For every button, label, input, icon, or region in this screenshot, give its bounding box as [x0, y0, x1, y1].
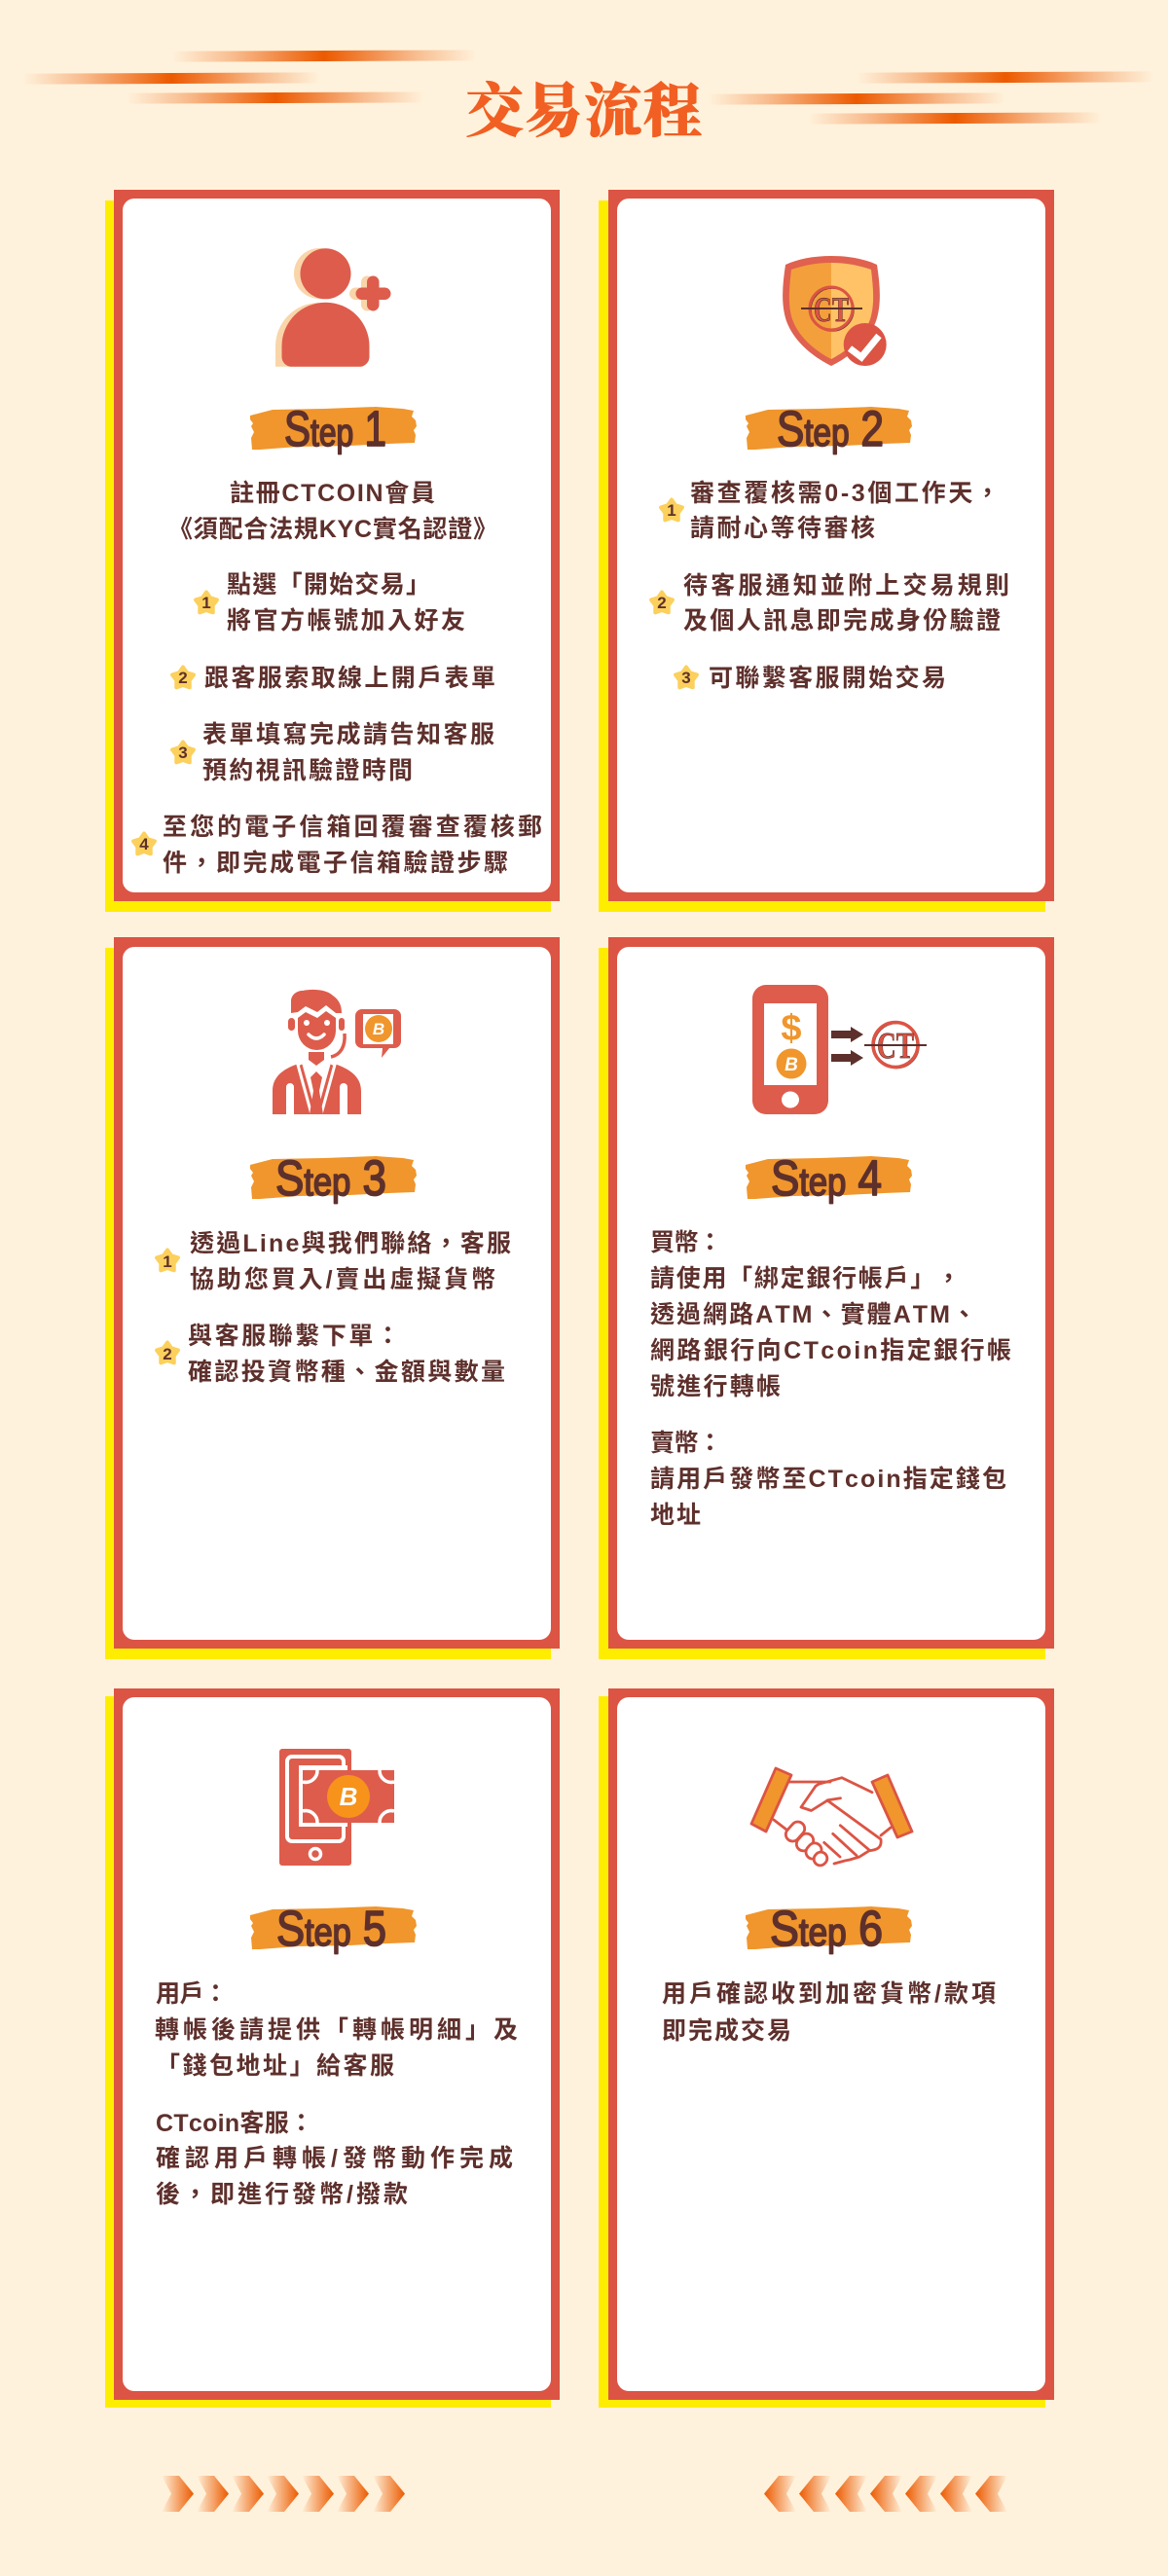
intro text: 註冊CTCOIN會員 [230, 480, 435, 507]
item 2: 與客服聯繫下單： [188, 1322, 400, 1350]
user text [155, 1980, 518, 2080]
item 4: 件，即完成電子信箱驗證步驟 [163, 850, 508, 877]
header [22, 50, 1154, 144]
arrow: left chevrons [764, 2476, 1007, 2512]
step 5 badge [250, 1901, 417, 1956]
item 3: 表單填寫完成請告知客服 [202, 720, 494, 748]
item 2: 確認投資幣種、金額與數量 [188, 1359, 505, 1386]
icon: phone paying CT: B [785, 1055, 798, 1075]
right speed streaks [708, 71, 1154, 125]
buy text: 買幣： [650, 1229, 722, 1256]
title: 交易流程 [465, 80, 702, 144]
panel: step 4 [599, 937, 1054, 1659]
icon: support agent [273, 990, 401, 1114]
card frame [599, 937, 1054, 1659]
step 1 badge: Step 1 [284, 401, 386, 456]
item 2: 2 [163, 1345, 172, 1363]
panel: step 6 [599, 1688, 1054, 2408]
item 3 [172, 720, 494, 784]
panel: step 1 [105, 190, 560, 912]
step 6 badge: Step 6 [770, 1901, 883, 1956]
step 1 badge [250, 401, 417, 456]
item 1: 1 [201, 594, 211, 612]
item 4 [133, 814, 542, 877]
item 1: 1 [163, 1252, 172, 1271]
item 1 [196, 571, 465, 635]
arrows [831, 1027, 863, 1066]
item 1: 將官方帳號加入好友 [227, 606, 465, 635]
icon: user add [275, 248, 391, 367]
left cuff [751, 1768, 791, 1832]
completion text [662, 1979, 996, 2045]
card frame [105, 937, 560, 1659]
item 1 [661, 480, 1000, 542]
CT logo: CT [877, 1026, 914, 1067]
item 3: 可聯繫客服開始交易 [709, 664, 946, 692]
item 4: 至您的電子信箱回覆審查覆核郵 [163, 814, 542, 841]
user text: 用戶： [156, 1980, 228, 2008]
item 2: 2 [657, 594, 667, 612]
icon: phone with bitcoin banknote [279, 1749, 394, 1866]
user text: 「錢包地址」給客服 [156, 2051, 394, 2080]
buy text: 網路銀行向CTcoin指定銀行帳 [650, 1337, 1011, 1364]
speech bubble with bitcoin: B [373, 1020, 384, 1038]
item 1: 1 [667, 501, 676, 520]
card frame [599, 190, 1054, 912]
item 4: 4 [139, 835, 149, 853]
item 2: 待客服通知並附上交易規則 [683, 571, 1009, 599]
service text [156, 2109, 513, 2208]
icon: phone paying CT: $ [781, 1008, 802, 1049]
item 2 [157, 1322, 505, 1386]
buy text: 請使用「綁定銀行帳戶」， [650, 1265, 961, 1292]
item 2 [651, 571, 1009, 635]
icon: phone with bitcoin banknote: B [340, 1782, 357, 1811]
sell text: 地址 [650, 1502, 701, 1529]
card frame [105, 1688, 560, 2408]
step 2 badge: Step 2 [777, 401, 884, 456]
buy text [650, 1229, 1011, 1400]
panel: step 2 [599, 190, 1054, 912]
buy text: 透過網路ATM、實體ATM、 [650, 1301, 976, 1328]
sell text: 請用戶發幣至CTcoin指定錢包 [650, 1466, 1006, 1493]
completion text: 用戶確認收到加密貨幣/款項 [662, 1979, 996, 2008]
user text: 轉帳後請提供「轉帳明細」及 [155, 2016, 518, 2044]
service text: 後，即進行發幣/撥款 [156, 2181, 408, 2208]
item 3: 3 [681, 669, 691, 687]
buy text: 號進行轉帳 [650, 1373, 781, 1400]
step 2 badge [746, 401, 912, 456]
right cuff [872, 1775, 912, 1837]
step 3 badge: Step 3 [275, 1150, 386, 1206]
step 5 badge: Step 5 [276, 1901, 386, 1956]
item 2: 跟客服索取線上開戶表單 [204, 664, 495, 692]
arrow: right chevrons [162, 2476, 405, 2512]
item 2: 及個人訊息即完成身份驗證 [683, 607, 1001, 635]
CT logo [864, 1022, 927, 1069]
icon: phone paying CT [752, 985, 927, 1114]
item 1: 協助您買入/賣出虛擬貨幣 [190, 1266, 495, 1293]
item 1: 點選「開始交易」 [227, 571, 430, 599]
item 1: 透過Line與我們聯絡，客服 [190, 1229, 511, 1257]
panel: step 3 [105, 937, 560, 1659]
sell text: 賣幣： [650, 1430, 722, 1457]
intro text: 《須配合法規KYC實名認證》 [168, 516, 497, 543]
item 1: 請耐心等待審核 [690, 515, 875, 542]
panel: step 5 [105, 1688, 560, 2408]
card frame [105, 190, 560, 912]
icon: handshake [751, 1768, 912, 1869]
card frame [599, 1688, 1054, 2408]
icon: shield with CT logo [783, 256, 887, 366]
item 1: 審查覆核需0-3個工作天， [690, 480, 1000, 507]
item 3: 3 [178, 744, 188, 762]
step 4 badge: Step 4 [771, 1150, 882, 1206]
left speed streaks [22, 50, 477, 104]
item 3: 預約視訊驗證時間 [202, 757, 413, 784]
service text: 確認用戶轉帳/發幣動作完成 [156, 2145, 513, 2172]
check badge [844, 323, 887, 366]
service text: CTcoin客服： [156, 2109, 313, 2137]
item 1 [157, 1229, 511, 1293]
CT logo: CT [814, 290, 849, 329]
completion text: 即完成交易 [662, 2017, 791, 2045]
sell text [650, 1430, 1006, 1529]
intro text [168, 480, 497, 543]
item 2: 2 [178, 669, 188, 687]
